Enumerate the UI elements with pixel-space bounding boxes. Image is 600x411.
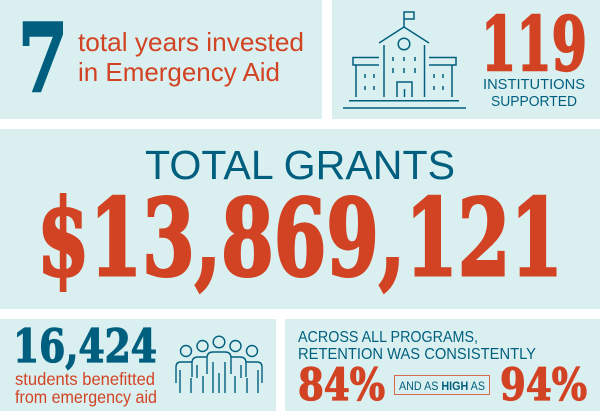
- stat 84%: 84%: [298, 360, 385, 411]
- big number 7: 7: [18, 4, 68, 114]
- institutions label: INSTITUTIONS: [483, 76, 585, 93]
- panel: years invested: [0, 0, 322, 119]
- years text: in Emergency Aid: [78, 57, 280, 87]
- panel: retention: [285, 319, 600, 411]
- heading: TOTAL GRANTS: [145, 142, 455, 188]
- retention text: RETENTION WAS CONSISTENTLY: [298, 346, 536, 363]
- icon: school building: [343, 12, 466, 108]
- panel: total grants: [0, 129, 600, 309]
- stat 94%: 94%: [500, 360, 587, 411]
- panel: students: [0, 319, 276, 411]
- retention text: ACROSS ALL PROGRAMS,: [298, 329, 478, 346]
- years text: [78, 27, 304, 87]
- icon: group of people: [176, 336, 262, 393]
- panel: institutions: [332, 0, 600, 119]
- institutions label: SUPPORTED: [491, 93, 577, 110]
- years text: total years invested: [78, 27, 304, 57]
- students text: [15, 369, 157, 407]
- and as high as box: AND AS HIGH AS: [399, 381, 485, 393]
- students text: from emergency aid: [15, 387, 157, 407]
- and as high as box: [394, 376, 490, 394]
- institutions label: [483, 76, 585, 110]
- number 16,424: 16,424: [13, 319, 157, 373]
- retention text: [298, 329, 536, 363]
- students text: students benefitted: [15, 369, 155, 389]
